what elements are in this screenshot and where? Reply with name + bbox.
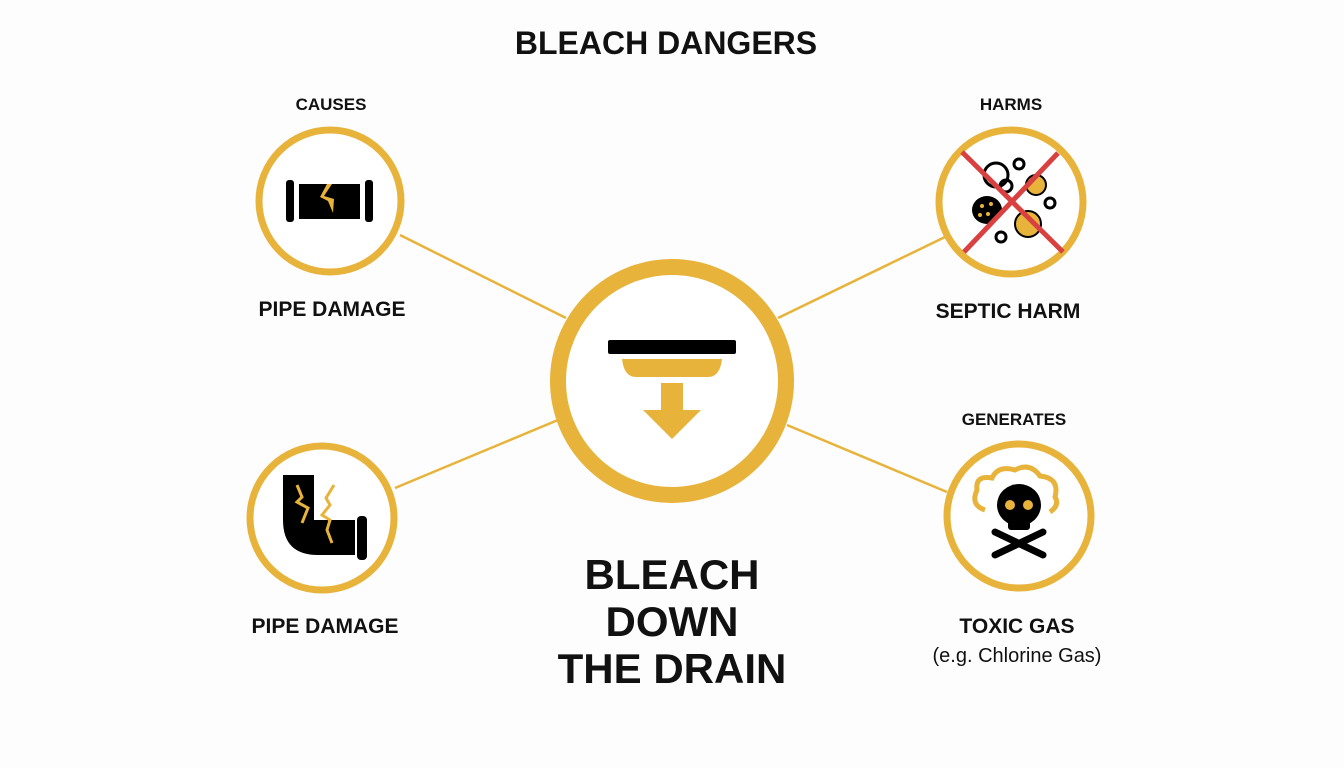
node: pipe damage bottom-left: PIPE DAMAGE	[251, 615, 399, 638]
center text: BLEACH	[584, 551, 760, 598]
center node	[558, 267, 786, 495]
node: pipe damage top-left: PIPE DAMAGE	[258, 298, 406, 321]
icon: skull in cloud	[975, 467, 1057, 555]
node: septic harm: SEPTIC HARM	[936, 300, 1080, 323]
node: toxic gas: GENERATES	[962, 410, 1066, 429]
center text	[558, 551, 786, 692]
node: septic harm: HARMS	[980, 95, 1042, 114]
node: toxic gas: (e.g. Chlorine Gas)	[933, 645, 1101, 667]
node: pipe damage top-left: CAUSES	[296, 95, 366, 114]
node: pipe damage top-left	[258, 95, 406, 321]
node: toxic gas: TOXIC GAS	[959, 615, 1075, 638]
node: pipe damage bottom-left	[250, 446, 399, 638]
icon: broken pipe	[286, 180, 373, 222]
node: toxic gas	[933, 410, 1101, 667]
title: BLEACH DANGERS	[515, 25, 817, 61]
icon: bacteria crossed out	[962, 152, 1063, 252]
connector lines	[395, 235, 947, 492]
icon: drain	[608, 340, 736, 439]
icon: cracked elbow pipe	[283, 475, 367, 560]
center text: DOWN	[606, 598, 738, 645]
center text: THE DRAIN	[558, 645, 786, 692]
node: septic harm	[936, 95, 1083, 323]
